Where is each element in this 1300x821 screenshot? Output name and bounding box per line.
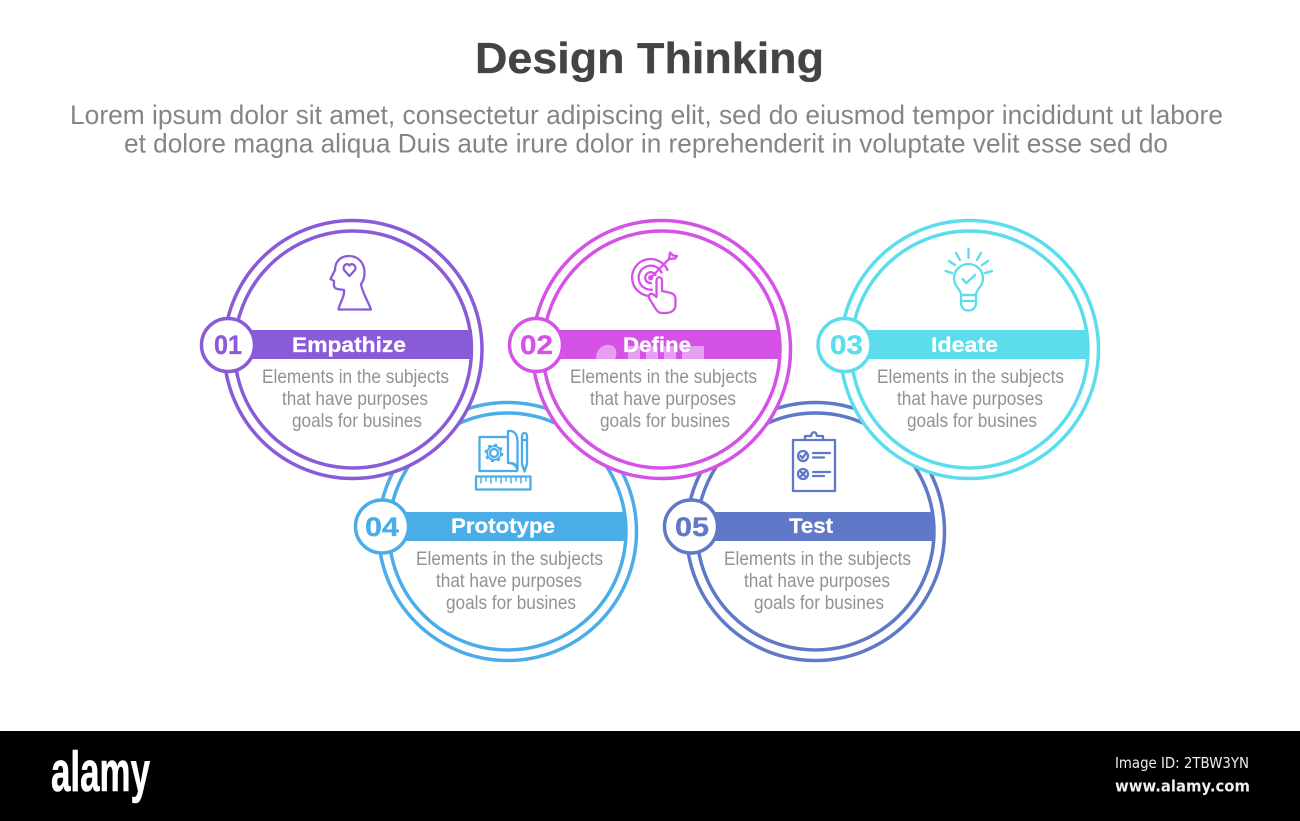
description: Ideate: that have purposes [897,389,1043,410]
band: Define [536,330,780,359]
description: Define: that have purposes [590,389,736,410]
logo: alamy: alamy [51,740,150,804]
number badge 03: 03 [830,330,863,360]
number badge 05 [664,500,718,553]
number badge 04: 04 [365,512,399,542]
description: Prototype: that have purposes [436,571,582,592]
description: Empathize [262,367,449,432]
label: Prototype: Prototype [451,515,555,538]
description: Prototype: Elements in the subjects [416,549,603,570]
label: Ideate: Ideate [931,334,998,357]
panel: 03 Ideate [818,220,1098,478]
description: Define: goals for busines [600,411,730,432]
number badge 04 [356,500,408,553]
subtitle text: et dolore magna aliqua Duis aute irure dolor in reprehenderit in voluptate velit esse sed do [124,128,1168,158]
icon: blueprint, gear, pencil and ruler [476,431,530,490]
label: Empathize: Empathize [292,334,406,357]
title: Design Thinking [475,34,824,83]
number badge 05: 05 [675,512,709,542]
description: Empathize: goals for busines [292,411,422,432]
description: Test: Elements in the subjects [724,549,911,570]
icon: head with heart [330,256,371,310]
website: www.alamy.com [1115,776,1250,796]
panel: 02 Define [510,220,790,478]
description: Test: goals for busines [754,593,884,614]
description: Ideate: goals for busines [907,411,1037,432]
description: Empathize: Elements in the subjects [262,367,449,388]
description: Define [570,367,757,432]
label: Define: Define [623,334,691,357]
icon: clipboard checklist [793,432,835,491]
description: Ideate [877,367,1064,432]
image id: Image ID: 2TBW3YN [1115,754,1249,772]
icon: light bulb with check [946,249,992,310]
band: Prototype [382,512,626,541]
subtitle text: Lorem ipsum dolor sit amet, consectetur adipiscing elit, sed do eiusmod tempor incididunt ut labore [70,100,1223,130]
panel: 04 Prototype [356,402,636,660]
description: Define: Elements in the subjects [570,367,757,388]
footer bar [0,731,1300,821]
description: Prototype [416,549,603,614]
icon: target, arrow and pointing hand [632,252,677,313]
panel: 05 Test [664,402,944,660]
band: Ideate [844,330,1088,359]
label: Test: Test [789,515,833,538]
subtitle text [70,100,1223,158]
description: Ideate: Elements in the subjects [877,367,1064,388]
panel: 01 Empathize [202,220,482,478]
number badge 01: 01 [214,330,242,360]
description: Test [724,549,911,614]
number badge 02 [510,318,562,372]
number badge 03 [818,318,871,372]
description: Empathize: that have purposes [282,389,428,410]
number badge 01 [202,318,254,372]
band: Empathize [228,330,472,359]
number badge 02: 02 [520,330,553,360]
description: Prototype: goals for busines [446,593,576,614]
band: Test [691,512,934,541]
description: Test: that have purposes [744,571,890,592]
